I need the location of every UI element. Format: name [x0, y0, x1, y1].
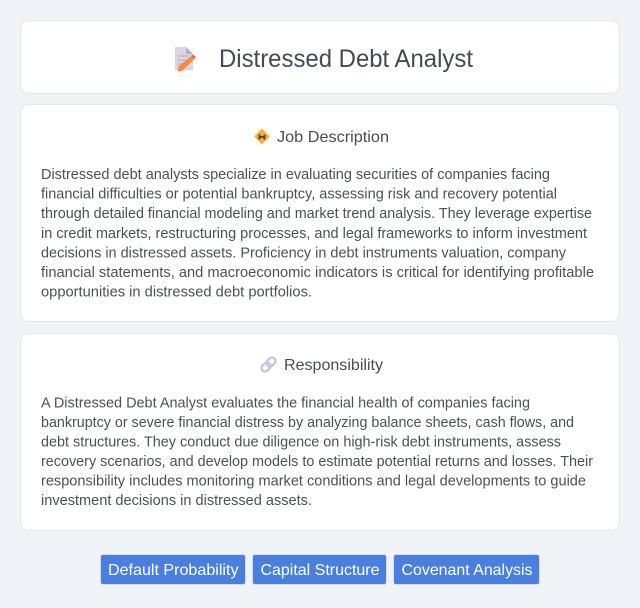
heading: responsibility: Responsibility [284, 357, 383, 374]
text block: responsibility: investment decisions in distressed assets. [41, 493, 312, 509]
text block: job description: Distressed debt analysts specialize in evaluating securities of companies facing [41, 167, 550, 183]
text block: job description [41, 167, 594, 301]
tag: capital structure: Capital Structure [260, 562, 380, 579]
icon: orange diamond sign [254, 128, 270, 144]
text block: job description: financial statements, and macroeconomic indicators is critical for identifying profitable [41, 265, 594, 281]
panel: job description [20, 104, 620, 322]
title: Distressed Debt Analyst [219, 45, 473, 73]
icon: chain link [260, 356, 277, 373]
text block: job description: opportunities in distressed debt portfolios. [41, 285, 312, 301]
tag: covenant analysis [394, 554, 540, 584]
text block: responsibility: A Distressed Debt Analyst evaluates the financial health of companies facing [41, 396, 530, 412]
text block: job description: decisions in distressed assets. Proficiency in debt instruments valuation, company [41, 245, 567, 261]
text block: responsibility: responsibility includes monitoring market conditions and legal developments to guide [41, 474, 586, 490]
text block: responsibility: recovery scenarios, and develop models to estimate potential returns and losses. Their [41, 454, 593, 470]
tag: default probability: Default Probability [108, 562, 239, 579]
text block: responsibility [41, 396, 593, 509]
tag: default probability [100, 554, 246, 584]
text block: job description: financial difficulties or potential bankruptcy, assessing risk and recovery potential [41, 187, 557, 203]
panel: title header [20, 20, 620, 94]
heading: job description: Job Description [277, 129, 389, 146]
panel: responsibility [20, 334, 620, 530]
text block: job description: in credit markets, restructuring processes, and legal frameworks to inform investment [41, 226, 587, 242]
text block: responsibility: bankruptcy or severe financial distress by analyzing balance sheets, cash flows, and [41, 415, 574, 431]
text block: job description: through detailed financial modeling and market trend analysis. They leverage expertise [41, 206, 592, 222]
tag: capital structure [252, 554, 386, 584]
tag: covenant analysis: Covenant Analysis [402, 562, 533, 579]
text block: responsibility: debt structures. They conduct due diligence on high-risk debt instruments, assess [41, 434, 561, 450]
icon: document with pencil [175, 47, 196, 72]
